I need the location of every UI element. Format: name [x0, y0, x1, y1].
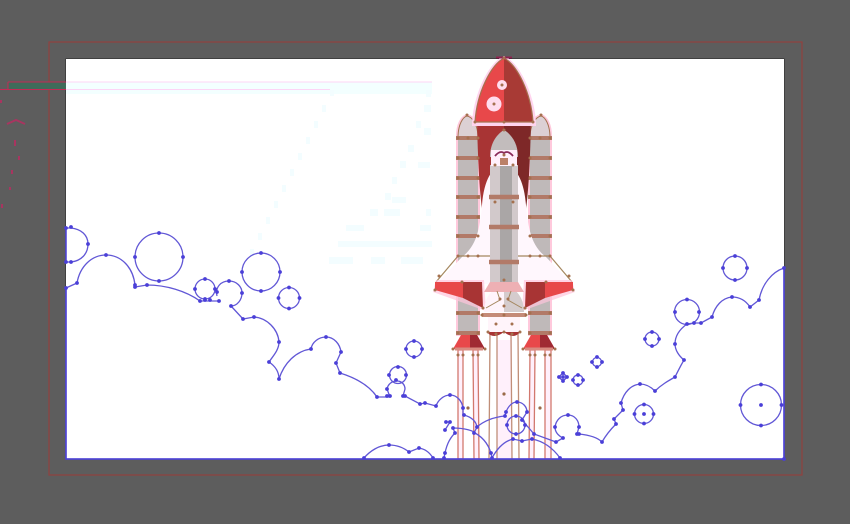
external tank nose cone	[472, 56, 536, 126]
left booster nozzle	[453, 335, 485, 349]
external tank lower section	[477, 122, 504, 215]
orbiter tail	[482, 282, 526, 336]
faint diagonal artifact fragments	[250, 90, 432, 264]
bleed guide outline	[49, 42, 802, 475]
right booster nozzle	[523, 335, 555, 349]
space shuttle	[433, 56, 575, 355]
exhaust flames	[458, 332, 551, 459]
artboard blue edges	[66, 228, 784, 459]
solid rocket booster: left	[456, 114, 480, 336]
artboard	[66, 58, 784, 460]
orbiter body and wing outline	[436, 165, 572, 284]
solid rocket booster: right	[528, 114, 552, 336]
right wing	[522, 280, 575, 311]
shuttle anchor points	[435, 58, 573, 355]
left wing	[433, 280, 486, 311]
cockpit	[491, 150, 517, 166]
external tank core	[489, 130, 519, 283]
hidden guide artifacts: top-left lines	[0, 82, 432, 208]
cloud outlines	[66, 228, 784, 459]
anchor points on clouds	[66, 227, 784, 459]
